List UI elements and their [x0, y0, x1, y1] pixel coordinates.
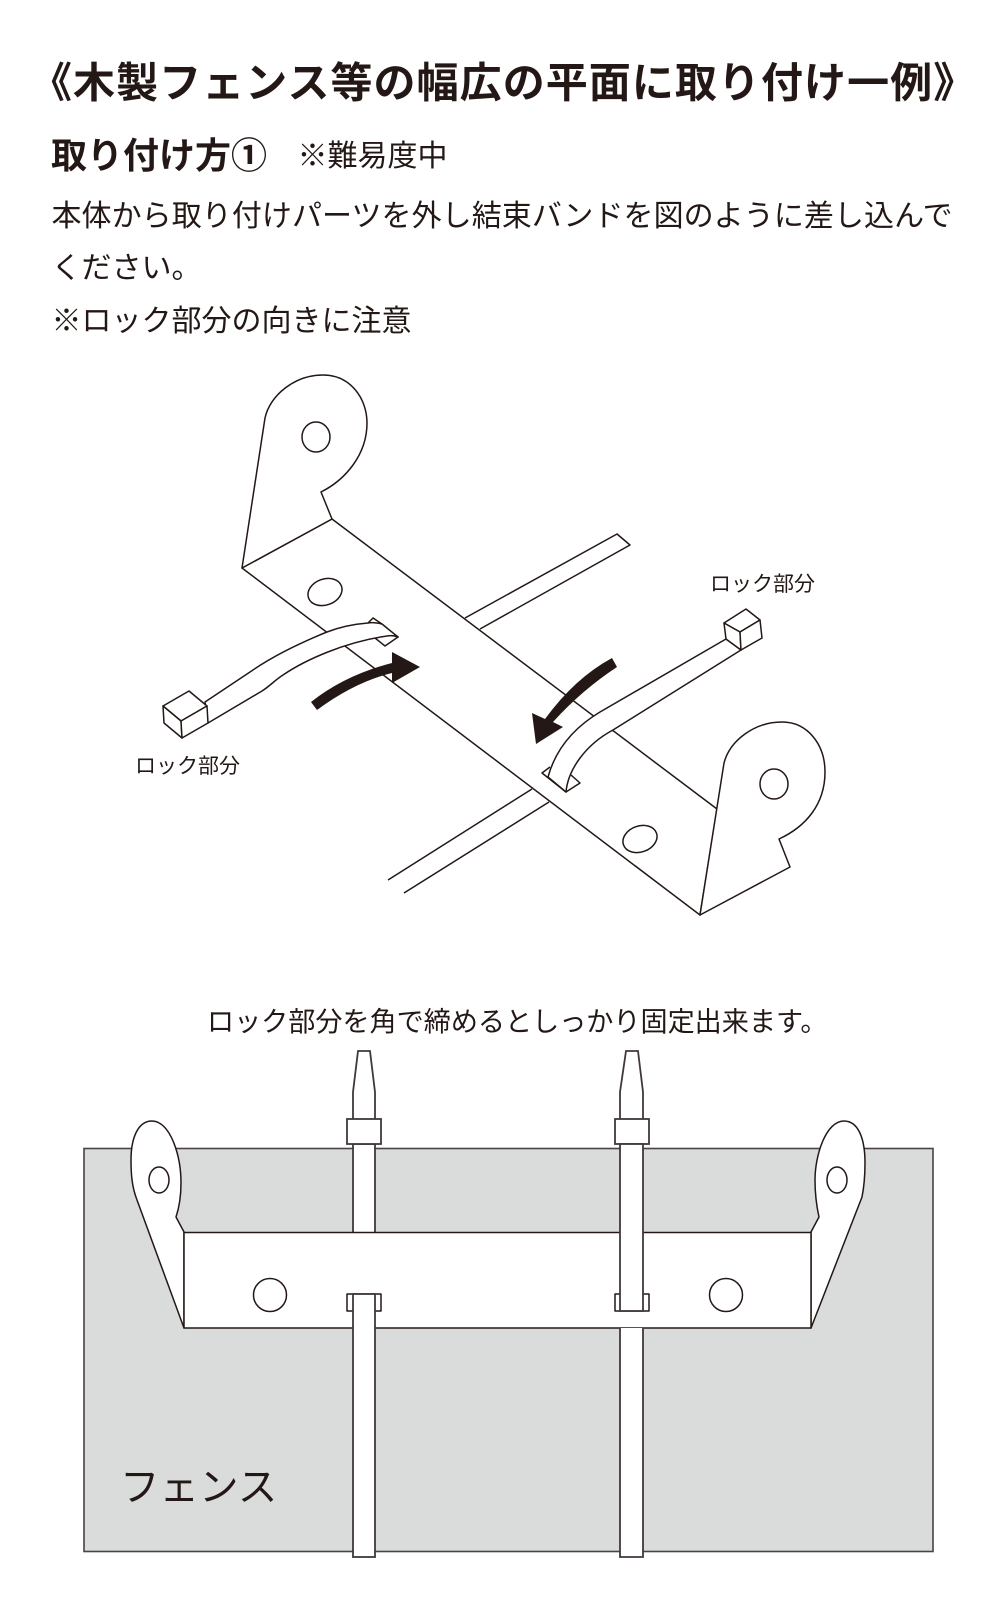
fence panel — [84, 1148, 933, 1552]
instructions text: ※ロック部分の向きに注意 — [52, 305, 412, 338]
front view diagram: mounted on fence — [84, 1051, 933, 1557]
subheading: step 1: 取り付け方① — [51, 135, 267, 176]
arrow: left tie direction — [311, 652, 420, 710]
left cable tie — [163, 618, 398, 738]
left strap top section — [347, 1051, 381, 1232]
flat band behind bracket — [388, 534, 630, 893]
label: lock part, left: ロック部分 — [135, 755, 240, 778]
right cable tie — [542, 609, 762, 792]
instructions text: 本体から取り付けパーツを外し結束バンドを図のように差し込んで — [52, 200, 953, 233]
right strap tip section — [615, 1051, 649, 1144]
bracket front face — [184, 1232, 811, 1328]
right bracket ear — [811, 1121, 865, 1328]
arrow: right tie direction — [532, 658, 617, 744]
bracket holes — [302, 422, 788, 857]
caption: ロック部分を角で締めるとしっかり固定出来ます。 — [207, 1006, 827, 1037]
bracket body — [242, 375, 825, 915]
bracket holes — [254, 1278, 742, 1312]
left bracket ear — [131, 1121, 184, 1328]
right strap over bracket and lower section — [615, 1144, 649, 1557]
instructions text: ください。 — [52, 252, 202, 285]
left strap lower section — [347, 1294, 381, 1557]
difficulty note: ※難易度中 — [298, 140, 448, 173]
title: 《木製フェンス等の幅広の平面に取り付け一例》 — [30, 60, 976, 106]
isometric diagram: inserting cable ties — [135, 375, 825, 915]
label: lock part, right: ロック部分 — [710, 573, 815, 596]
instructions text — [52, 200, 953, 338]
fence label: フェンス — [120, 1466, 277, 1510]
